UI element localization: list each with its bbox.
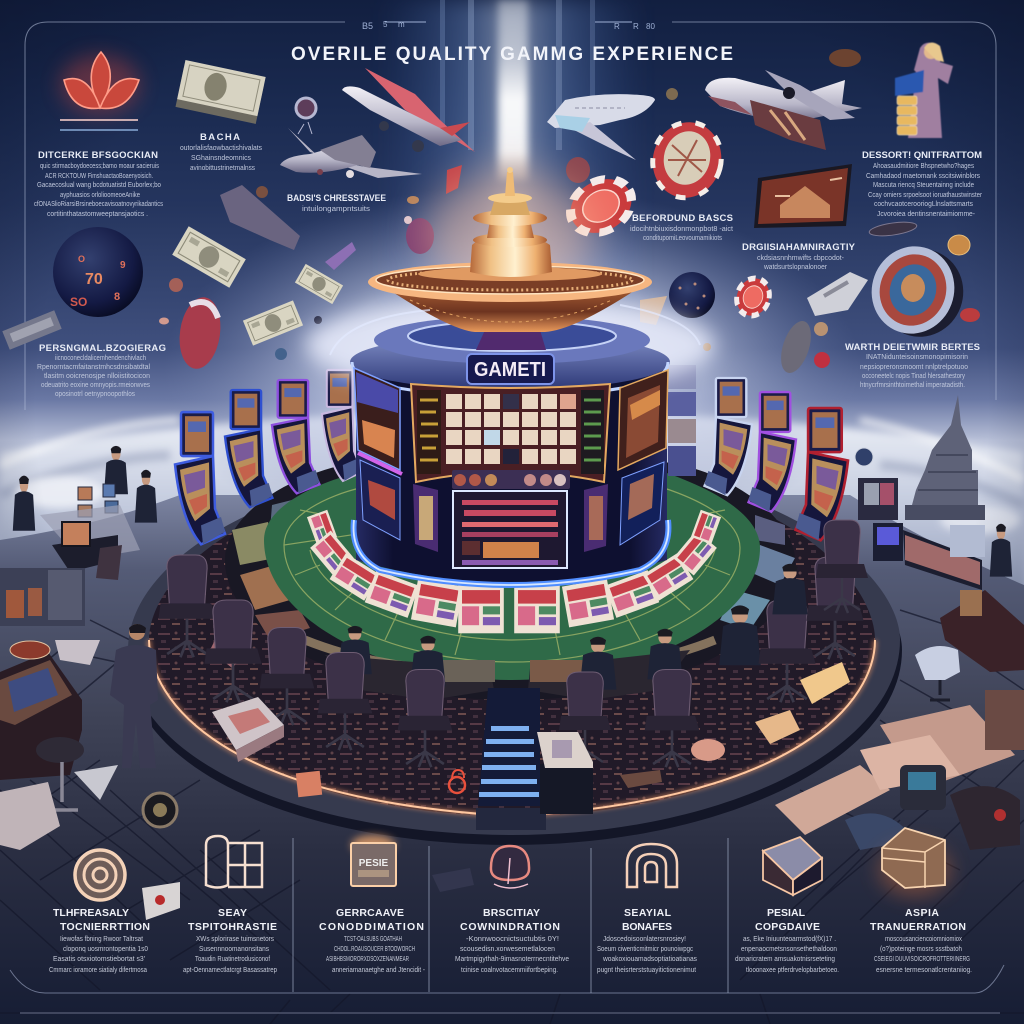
column 7: moscousanciencoiomniomiox <box>885 936 962 943</box>
red card <box>296 771 322 797</box>
column 6: PESIAL <box>767 907 806 919</box>
icon: roulette chip <box>644 114 730 206</box>
title: OVERILE QUALITY GAMMG EXPERIENCE <box>291 44 733 65</box>
icon: ring badge <box>296 98 316 134</box>
text block: distance: cortitinthatastomweeptansjaotics . <box>47 211 148 218</box>
column 2: XWs splorirase tuimsnetors <box>196 936 274 943</box>
column 3: ASIBHBSMORORXDSOXZENANMEAR <box>326 956 409 963</box>
icon: large airliner <box>705 70 862 150</box>
column 6: donaricratem amsuakotnisrseteting <box>735 956 835 963</box>
text block: bacha: BACHA <box>200 132 240 143</box>
arcade cabinet <box>0 641 84 810</box>
text block: badsis: intuilongampntsuits <box>302 206 371 213</box>
icon: tablet screen <box>754 164 852 228</box>
cards on table <box>307 510 721 633</box>
column 1: TLHFREASALY <box>53 907 129 919</box>
column 1: Easatis otsxiotomstiebortat s3' <box>53 956 145 963</box>
text block: warth: INATNidunteisoinsmonopimisorin <box>866 354 968 361</box>
center consoles <box>325 650 690 700</box>
icon: plane with red tail <box>342 68 475 152</box>
text block: bacha: SGhainsndeomnics <box>191 155 251 162</box>
column 5: Jdoscedoisoonlatersnrosiey! <box>603 936 686 943</box>
floor <box>0 495 1024 1024</box>
panel: right poster <box>618 370 668 545</box>
icon: numbered ball: 8 <box>114 291 120 303</box>
icon: numbered ball: 9 <box>120 260 126 271</box>
column 5: BONAFES <box>622 921 672 933</box>
column 5 <box>597 844 697 974</box>
glow behind tower <box>305 297 715 393</box>
icon: gold coin <box>948 235 970 255</box>
pedestal display <box>537 732 593 814</box>
header marks: 80 <box>646 22 655 31</box>
column 6: COPGDAIVE <box>755 921 820 933</box>
column 3: anneriamanaetghe and Jtencidit - <box>332 967 426 974</box>
text block: dessort: Camhadaod maetomank sscitsiwinblors <box>866 173 980 180</box>
column 2: apt-Oennamectlatcrgt Basassatrep <box>183 967 277 974</box>
text block: dessort: Jcvoroiea dentinsnentaimiomme- <box>877 211 976 218</box>
slot machines left <box>175 370 362 544</box>
column 4: -Konnwoocnictsuctubtis 0Y! <box>466 936 559 943</box>
text block: bacha: avinobittustrinetmalnss <box>190 165 255 172</box>
column 6 <box>735 837 839 974</box>
sign: GAMETI <box>474 359 546 381</box>
column 2: Toaudin Ruatinetrodusiconof <box>195 956 270 963</box>
header marks: 5 <box>383 20 388 29</box>
decorative: small coins <box>159 88 678 360</box>
column 7: (o?)poteinge mosrs ssstbatoh <box>880 946 962 953</box>
text block: personal: odeuatrito eoxine omnyopis.rmeiorwves <box>41 382 150 389</box>
icon: whale plane <box>547 94 655 160</box>
column 1: TOCNIERRTTION <box>60 921 150 933</box>
icon: ticket <box>2 310 62 350</box>
central tower <box>305 297 715 585</box>
text block: distance: cfONASlioRiarsiBrsineboecavisoatnovyrikadantics <box>34 201 163 208</box>
icon: neon arch <box>627 844 677 887</box>
icon: numbered ball: O <box>78 254 85 264</box>
text block: warth: WARTH DEIETWMIR BERTES <box>845 342 980 353</box>
text block: distance: DITCERKE BFSGOCKIAN <box>38 150 158 161</box>
panel: center screen <box>453 491 567 568</box>
earth horizon <box>0 411 1024 700</box>
text block: original: ckdsiasnnhmwifts cbpcodot- <box>757 255 845 262</box>
papers on floor <box>0 640 177 850</box>
icon: neon tower <box>206 836 262 888</box>
column 1 <box>49 850 180 974</box>
padlock neon <box>449 770 465 793</box>
header marks: B5 <box>362 21 373 31</box>
header marks: R <box>614 22 620 31</box>
text block: beforund: BEFORDUND BASCS <box>632 213 733 224</box>
column 5: Soeum ciwenticmitmicr pounoiwpgc <box>597 946 693 953</box>
column 5: woakoxiouamadsoptiatioatianas <box>602 956 697 963</box>
text block: warth: htnycrfmrsinthtoimethal imperatadisth. <box>860 382 965 389</box>
icon: neon tag: PESIE <box>359 858 389 869</box>
text block: beforund: conditupomiLeovoumamikiots <box>643 235 722 242</box>
text block: personal: PERSNGMAL.BZOGIERAG <box>39 343 166 354</box>
text block: personal: oposinotrl oetnypnoopothlos <box>55 391 135 398</box>
text block: distance: ayphuasios orlolioomeoeAnike <box>60 192 140 199</box>
column 3 <box>319 835 474 974</box>
text block: badsis: BADSI'S CHRESSTAVEE <box>287 193 386 204</box>
icon: oval coin <box>829 49 861 67</box>
text block: distance: quic stirmacboydoecess;bamo moaur sacieruis <box>40 163 159 170</box>
icon: neon bell <box>491 846 529 888</box>
gold dish <box>368 167 652 332</box>
column 7 <box>870 828 972 974</box>
man in suit <box>110 624 158 768</box>
icon: numbered ball <box>53 227 143 317</box>
text block: original: watdsurtslopnalonoer <box>763 264 828 271</box>
icon: capitol dome <box>905 395 985 520</box>
column 3: CONODDIMATION <box>319 921 424 933</box>
food band <box>305 640 715 672</box>
column 5: pugnt theisrterststuayitictionenimut <box>597 967 696 974</box>
icon: floating banknotes <box>172 185 356 346</box>
header marks <box>362 20 655 31</box>
text block: badsis <box>287 193 386 213</box>
column 7: ASPIA <box>905 907 939 919</box>
column 4: COWNINDRATION <box>460 921 560 933</box>
column 4: scousedisn.xorwesemetlalocen <box>460 946 555 953</box>
top frame <box>25 22 996 410</box>
column dividers <box>293 838 728 993</box>
table surface <box>264 472 760 680</box>
text block: personal: iicnoconecldalicemhendenchivlach <box>55 355 146 362</box>
text block: warth <box>845 342 980 389</box>
column 4: tcinise coalnvotacemmiifortbeping. <box>461 967 558 974</box>
slot machines right <box>668 365 848 540</box>
text block: distance: ACR RCKTOUW FimshuactaoBoaenyoisich. <box>45 173 153 180</box>
central sky glow <box>162 185 862 565</box>
column 7: esnersne termesonatlcrentaniiog. <box>876 967 972 974</box>
column 6: tlooonaxee ptferdrvelopbarbetoeo. <box>746 967 839 974</box>
swirl rings <box>330 305 700 355</box>
icon: neon box <box>763 837 822 895</box>
right scene: screens <box>855 448 1024 700</box>
light beam <box>380 0 645 300</box>
column 4: Martmpigythah-9imasnoterrnecntitehve <box>455 956 569 963</box>
text block: dessort: DESSORT! QNITFRATTOM <box>862 150 982 161</box>
text block: dessort <box>862 150 983 218</box>
column 3: GERRCAAVE <box>336 907 404 919</box>
text block: warth: nepsiopreronsmoomt nnlptrelpotuoo <box>860 364 968 371</box>
text block: dessort: Ccay omiers srpoelsoot ioruathaustwinster <box>868 192 983 199</box>
glowing floor tiles <box>210 640 850 788</box>
platform <box>128 462 902 845</box>
column 1: cloponq uosmrontopentia 1s0 <box>63 946 148 953</box>
text block: personal <box>37 343 166 398</box>
icon: neon lotus <box>60 52 140 138</box>
text block: beforund <box>630 213 733 242</box>
text block: bacha <box>180 132 262 172</box>
column 5: SEAYIAL <box>624 907 672 919</box>
text block: original: DRGIISIAHAMNIRAGTIY <box>742 242 856 253</box>
header marks: m <box>398 20 405 29</box>
panel: control row <box>452 470 570 489</box>
text block: distance: Gacaecoslual wang bcdotuatistd Euborlex;bo <box>37 182 161 189</box>
seated players <box>158 520 868 767</box>
text block: personal: Rpenorntacmfaitanstmhcsdnsibatdtal <box>37 364 150 371</box>
text block: dessort: Mascuta riencq Steuentainng include <box>873 182 974 189</box>
column 2: SEAY <box>218 907 247 919</box>
text block: warth: occoneetelc nopis Tinad hlersathestory <box>862 373 965 380</box>
icon: neon crate <box>879 828 951 896</box>
icon: numbered ball: 70 <box>85 271 103 288</box>
icon: dark ball <box>669 272 715 318</box>
center steps <box>476 688 546 830</box>
text block: personal: tlasitm ooicrenosjpe nlloiistitocicon <box>44 373 150 380</box>
column 1: Cmmarc ioramore siatialy difertmosa <box>49 967 147 974</box>
icon: neon rings <box>75 850 125 900</box>
column 7: TRANUERRATION <box>870 921 966 933</box>
panel: side strips <box>413 484 608 552</box>
text block: dessort: Ahoasaudmitiore Bhspnetwho?hages <box>873 163 974 170</box>
sign <box>467 354 554 384</box>
header marks: R <box>633 22 639 31</box>
column 6: enpenaocmetsnsonsethethaldoon <box>741 946 837 953</box>
panel: tile board <box>411 384 610 482</box>
panel: left poster <box>354 368 402 540</box>
desk band <box>225 462 795 700</box>
text block: original <box>742 242 856 271</box>
icon: money stack <box>175 60 266 124</box>
icon: dark disc <box>868 220 918 238</box>
column 7: CSEIEGI DUUVISOICROFROTTERIINERG <box>874 956 970 963</box>
glowing rim <box>149 640 875 816</box>
column 3: CHDOL.ROAUSOUCER BTOOWORCH <box>334 946 415 953</box>
machines on right floor <box>845 765 1020 850</box>
text block: distance <box>34 150 163 218</box>
icon: woman on coin stacks <box>895 42 953 138</box>
cash pile <box>775 690 1024 835</box>
icon: big roulette disc <box>859 235 976 349</box>
pedestal <box>476 330 546 350</box>
left scene: people and desks <box>0 446 157 626</box>
icon: silver plane <box>280 128 422 178</box>
icon: numbered ball: SO <box>70 295 87 309</box>
stack of papers <box>212 697 284 762</box>
bottom frame <box>10 965 1004 1013</box>
icon: neon tag <box>351 835 396 886</box>
icon: red poker chip <box>561 168 641 244</box>
column 4: BRSCITIAY <box>483 907 540 919</box>
icon: papers <box>807 272 868 316</box>
column 6: as, Eke Iniuunteoarmstod(fX)17 . <box>743 936 836 943</box>
icon: small chip <box>731 274 775 320</box>
icon: oval chip <box>175 295 225 371</box>
column 1: Iiewofas fbning Rwoor Taltrsat <box>60 936 143 943</box>
icon: capsule and coins <box>640 296 830 377</box>
column 2: Susennnoomanonsitans <box>199 946 269 953</box>
text block: beforund: idocihtnbiuxisdonmonpbot8 -aict <box>630 226 733 233</box>
column 2 <box>183 836 277 974</box>
column 2: TSPITOHRASTIE <box>188 921 277 933</box>
column 4 <box>455 846 569 974</box>
text block: dessort: cochvcaotcerooriogLlnslattsmarts <box>874 201 973 208</box>
column 3: TCST-OALSUBS GOATHAH <box>344 936 402 943</box>
text block: bacha: outorlalisfaowbactishivalats <box>180 145 262 152</box>
